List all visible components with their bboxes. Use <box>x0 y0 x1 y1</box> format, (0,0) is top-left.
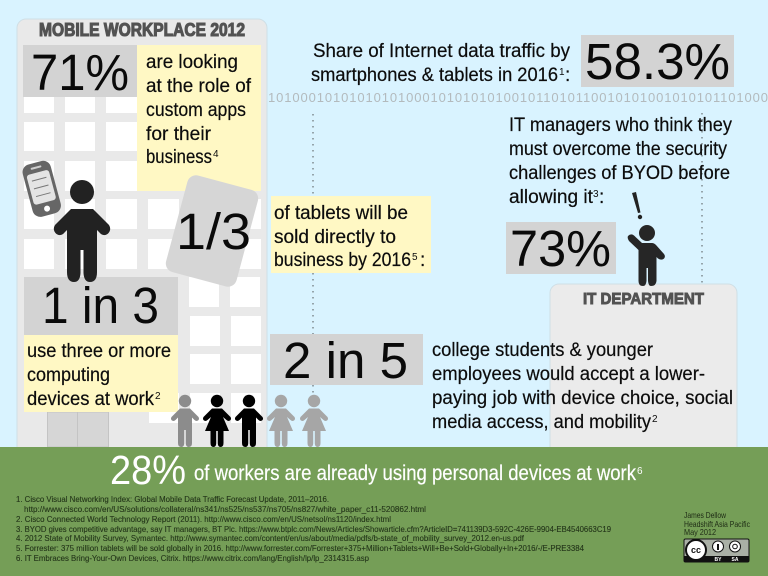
stat: 58.3% number box: 58.3% <box>585 33 730 90</box>
text block: tablets sold to business: 5 <box>412 252 418 263</box>
text block: custom apps: for their <box>146 124 212 145</box>
icon: person with phone <box>54 180 110 282</box>
text block: three or more devices: computing <box>27 365 110 386</box>
text block: custom apps: business <box>146 147 212 168</box>
text block: references: 4. 2012 State of Mobility Survey, Symantec. http://www.symantec.com/content/en/us/about/media/pdfs/b-state_of_mobility_survey_2012.en-us.pdf <box>16 534 525 543</box>
text block: author credit: James Dellow <box>684 510 727 520</box>
icon: row of five people, two highlighted <box>171 395 328 447</box>
stat: 71% number box: 71% <box>31 44 129 101</box>
text block: IT managers: IT managers who think they <box>509 115 732 136</box>
building doors <box>48 412 108 447</box>
text block: internet traffic share <box>311 41 570 86</box>
text block: tablets sold to business: sold directly to <box>274 227 396 248</box>
icon: creative commons BY-SA badge: SA <box>732 557 739 563</box>
text block: three or more devices: use three or more <box>27 341 171 362</box>
text block: custom apps: are looking <box>146 52 238 73</box>
text block: tablets sold to business: : <box>420 250 425 271</box>
stat: 73% number box: 73% <box>510 220 611 277</box>
text block: author credit: Headshift Asia Pacific <box>684 519 750 529</box>
text block: tablets sold to business: of tablets will be <box>274 203 408 224</box>
text block: references: 3. BYOD gives competitive advantage, say IT managers, BT Plc. https://www.btplc.com/News/Articles/Showarticle.cfm?ArticleID=741139D3-592C-426E-9904-EB4540663C19 <box>16 525 612 534</box>
text block: tablets sold to business: business by 2016 <box>274 250 411 271</box>
text block: college students: 2 <box>652 414 658 425</box>
panel: office building <box>17 19 267 459</box>
text block: IT managers: challenges of BYOD before <box>509 163 730 184</box>
text block: custom apps: custom apps <box>146 100 246 121</box>
icon: exclamation mark <box>632 192 642 219</box>
text block: references: 2. Cisco Connected World Technology Report (2011). http://www.cisco.com/en/US/netsol/ns1120/index.html <box>16 515 391 524</box>
icon: IT manager pointing up <box>628 225 665 286</box>
text block: three or more devices <box>24 335 178 412</box>
stat: 1 in 3 number box: 1 in 3 <box>42 277 159 334</box>
text block: IT managers: allowing it <box>509 187 594 208</box>
text block: IT managers <box>509 115 732 208</box>
text block: references: 6. IT Embraces Bring-Your-Own Devices, Citrix. https://www.citrix.com/lang/English/lp/lp_2314315.asp <box>16 554 370 563</box>
dotted connector: left <box>312 114 314 394</box>
text block: three or more devices: devices at work <box>27 389 154 410</box>
text block: internet traffic share: smartphones & tablets in 2016 <box>311 65 558 86</box>
title: MOBILE WORKPLACE 2012 <box>39 20 245 40</box>
text block: IT managers: must overcome the security <box>509 139 727 160</box>
text block: custom apps: 4 <box>213 149 219 160</box>
text block: college students <box>432 340 733 433</box>
dotted connector: right <box>701 113 703 284</box>
text block: custom apps <box>137 45 261 191</box>
callout: 28% of workers: 6 <box>637 466 643 477</box>
text block: references: 5. Forrester: 375 million tablets will be sold globally in 2016. http://www.forrester.com/Forrester+375+Million+Tablets+Will+Be+Sold+Globally+In+2016/-/E-PRE3384 <box>16 544 585 553</box>
text block: references <box>16 495 612 563</box>
stat: 2 in 5 number box: 2 in 5 <box>283 332 408 389</box>
heading: IT department: IT DEPARTMENT <box>583 291 705 308</box>
text block: author credit: May 2012 <box>684 527 716 537</box>
stat: 1/3 tilted card <box>164 173 260 289</box>
stat: 1/3 tilted card: 1/3 <box>176 203 251 260</box>
text block: college students: employees would accept a lower- <box>432 364 705 385</box>
text block: tablets sold to business <box>271 196 431 273</box>
panel: IT department building <box>550 284 737 459</box>
text block: custom apps: at the role of <box>146 76 252 97</box>
icon: creative commons BY-SA badge: cc <box>691 545 701 555</box>
callout: 28% of workers <box>110 447 643 493</box>
text block: internet traffic share: Share of Internet data traffic by <box>313 41 570 62</box>
text block: internet traffic share: : <box>565 65 570 86</box>
callout: 28% of workers: 28% <box>110 447 186 493</box>
text block: college students: media access, and mobility <box>432 412 651 433</box>
text block: references: 1. Cisco Visual Networking Index: Global Mobile Data Traffic Forecast Update, 2011–2016. <box>16 495 329 504</box>
panel: footer band <box>0 447 768 576</box>
text block: IT managers: 3 <box>593 189 599 200</box>
callout: 28% of workers: of workers are already using personal devices at work <box>194 462 636 485</box>
text block: references: http://www.cisco.com/en/US/solutions/collateral/ns341/ns525/ns537/ns705/ns827/white_paper_c11-520862.html <box>24 505 426 514</box>
icon: creative commons BY-SA badge <box>684 539 749 563</box>
text block: three or more devices: 2 <box>155 391 161 402</box>
binary data stream: 10100010101010101000101010101001011010110010101001010101101000 <box>268 90 768 105</box>
text block: IT managers: : <box>599 187 604 208</box>
text block: internet traffic share: 1 <box>559 67 565 78</box>
text block: college students: paying job with device choice, social <box>432 388 733 409</box>
text block: college students: college students & younger <box>432 340 654 361</box>
icon: creative commons BY-SA badge: BY <box>715 557 722 563</box>
text block: author credit <box>684 510 750 537</box>
icon: smartphone <box>21 159 63 219</box>
